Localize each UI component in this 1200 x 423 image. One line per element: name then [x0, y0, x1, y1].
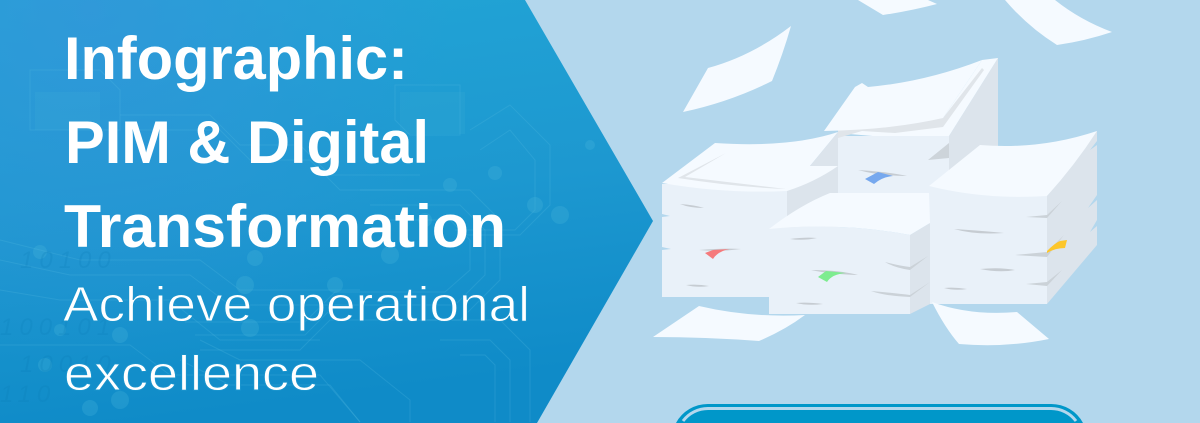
title: PIM & Digital — [65, 109, 429, 176]
button (cropped at bottom edge) — [676, 404, 1083, 423]
title — [64, 25, 506, 260]
subtitle: excellence — [64, 347, 319, 401]
paper stack: left — [662, 132, 838, 297]
decorative binary digits: 10010 — [20, 351, 117, 378]
subtitle: Achieve operational — [63, 278, 530, 332]
decorative binary digits: 10100 — [20, 247, 117, 274]
decorative binary digits — [46, 252, 47, 253]
decorative binary digits: 110 — [0, 381, 56, 408]
title: Infographic: — [64, 25, 408, 92]
paper stack: back — [824, 58, 998, 206]
decorative binary digits: 100101 — [0, 314, 116, 341]
flying papers top — [683, 0, 1112, 112]
panel: blue arrow with circuit texture — [0, 0, 660, 423]
title: Transformation — [64, 193, 506, 260]
paper stack: right — [929, 131, 1097, 304]
paper stack: front — [769, 193, 930, 314]
flying papers bottom — [653, 302, 1049, 345]
subtitle — [63, 278, 530, 401]
